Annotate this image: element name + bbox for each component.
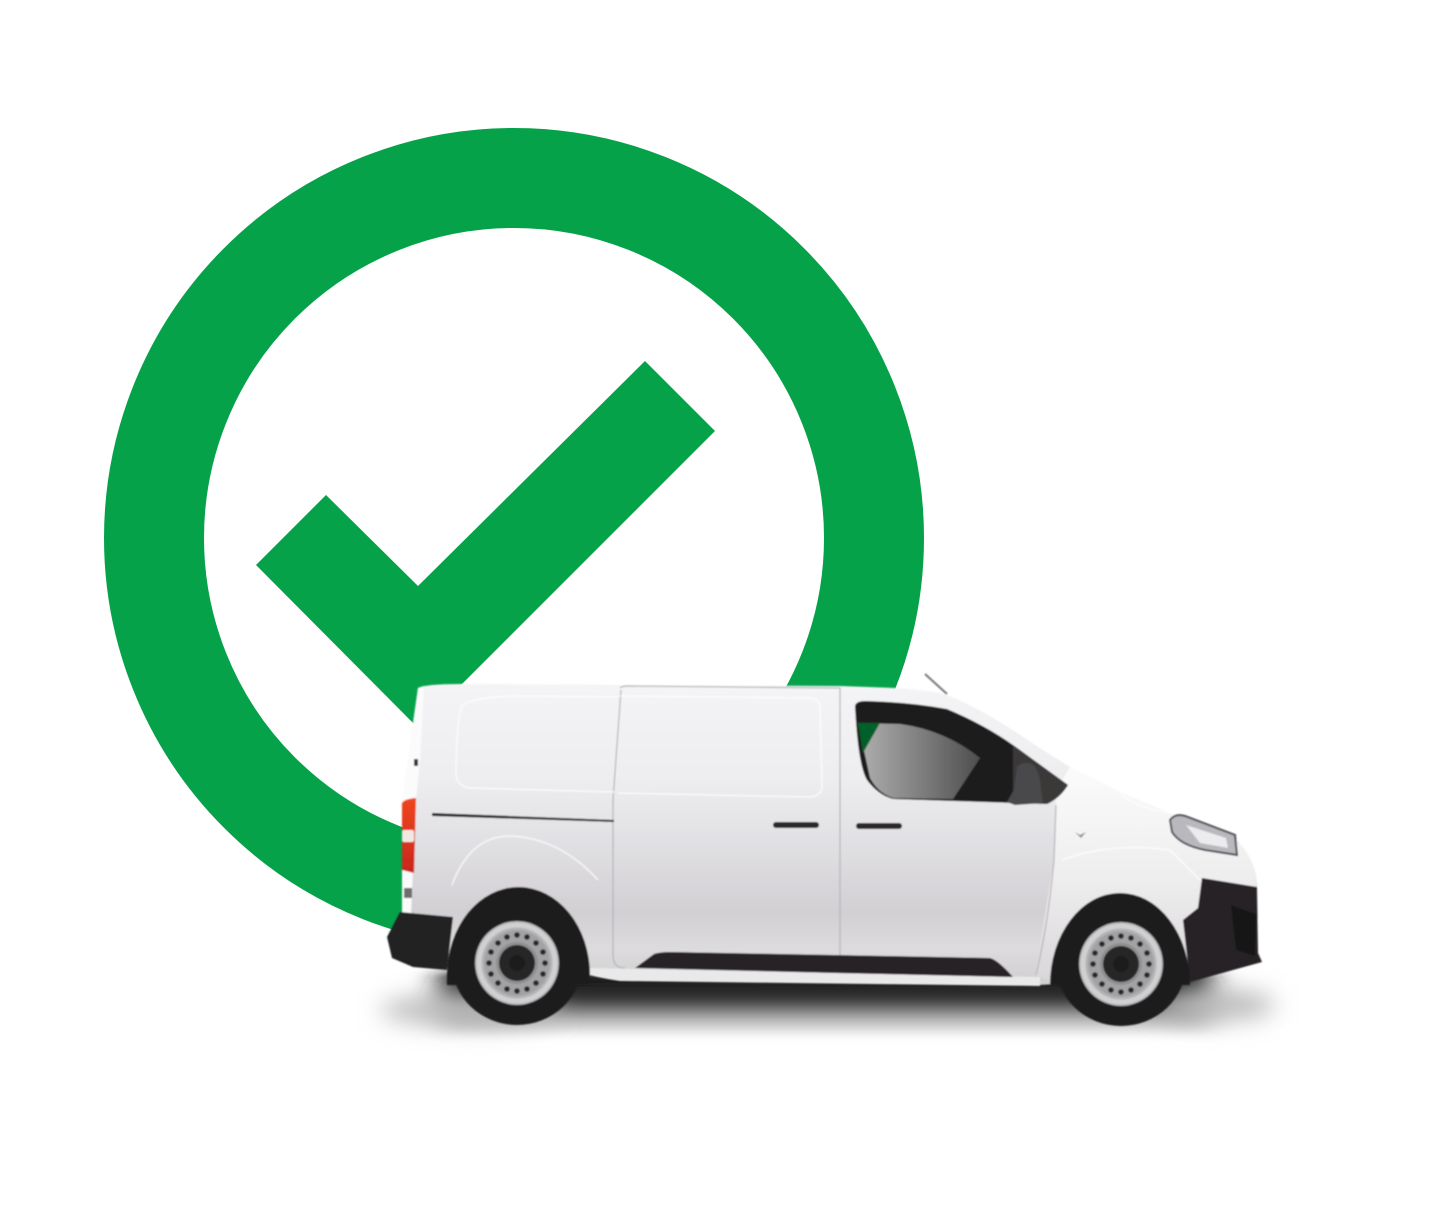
van	[387, 674, 1262, 1026]
headlight	[1170, 815, 1237, 855]
rear wheel arch	[447, 887, 590, 985]
antenna	[925, 674, 947, 694]
rear tail light	[402, 759, 418, 898]
front badge	[1075, 832, 1086, 838]
front wheel	[1056, 902, 1186, 1026]
side rub strip	[432, 813, 614, 822]
icon: green ring	[154, 178, 874, 898]
cab window	[855, 701, 1068, 804]
rear door edge	[402, 686, 424, 915]
rear wheel	[452, 901, 582, 1025]
icon: check mark	[256, 361, 715, 728]
ground shadow under van	[380, 972, 1275, 1038]
side panel lines	[613, 686, 1056, 975]
pressed panels	[452, 696, 1200, 885]
wing mirror	[1007, 763, 1043, 805]
side moulding	[635, 952, 1013, 977]
rear bumper	[387, 912, 453, 970]
front bumper	[1183, 878, 1262, 982]
lower sill	[590, 968, 1040, 986]
front wheel arch	[1050, 893, 1190, 985]
van body	[402, 684, 1258, 985]
door handles	[773, 822, 902, 829]
cab and bonnet panel	[1035, 767, 1257, 985]
